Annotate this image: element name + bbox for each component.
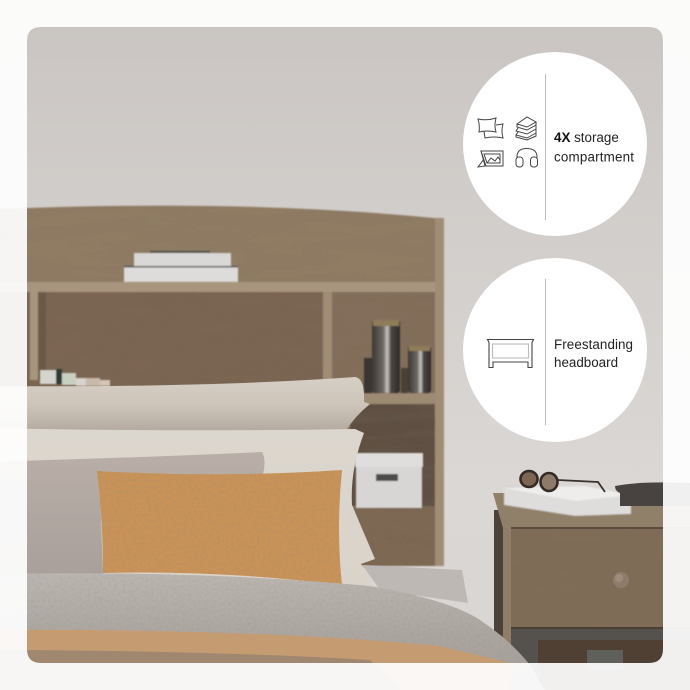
divider: [545, 74, 546, 220]
glass jars: [364, 320, 431, 393]
circle background: [463, 52, 647, 236]
icon: picture frame: [478, 151, 503, 167]
blanket with orange stripe: [27, 573, 528, 690]
back pillow: [0, 377, 370, 432]
grey pillow: [0, 452, 264, 574]
icon: headphones: [516, 148, 538, 167]
text: Freestanding headboard: headboard: [554, 355, 618, 370]
text: Freestanding headboard: Freestanding: [554, 337, 633, 352]
stacked books on top shelf: [124, 251, 238, 282]
icon: pillows: [478, 118, 503, 138]
text: 4X storage compartment: 4X storage: [554, 130, 619, 145]
callout: freestanding headboard: [463, 258, 647, 442]
drawer knob: [613, 572, 629, 588]
small books on lower shelf: [40, 369, 110, 386]
white storage box: [355, 453, 423, 508]
divider: [545, 279, 546, 425]
text: 4X storage compartment: compartment: [554, 150, 634, 164]
nightstand: [493, 493, 690, 690]
front white pillow: [0, 428, 375, 588]
icon: headboard: [488, 340, 534, 368]
sunglasses: [520, 471, 605, 492]
headboard: [0, 196, 450, 571]
circle background: [463, 258, 647, 442]
white book on nightstand: [504, 486, 631, 516]
icon: stack of books: [516, 117, 536, 140]
orange lumbar pillow: [97, 470, 342, 584]
sheet behind blanket: [362, 565, 468, 603]
callout: storage compartment: [463, 52, 647, 236]
dark round box: [615, 482, 690, 506]
